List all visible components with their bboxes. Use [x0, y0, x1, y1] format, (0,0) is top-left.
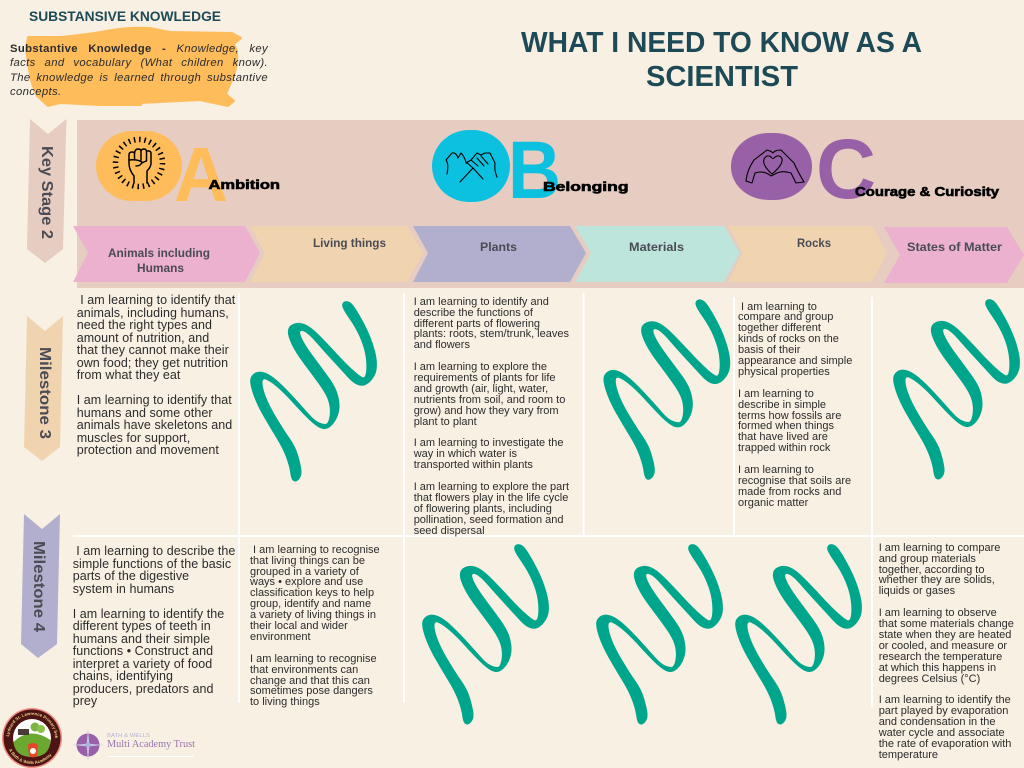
text: plants milestone 3: seed dispersal	[414, 525, 485, 537]
arrow: living things: Living things	[313, 236, 386, 250]
text: plants milestone 3: I am learning to investigate the	[414, 437, 564, 449]
text: rocks milestone 3: compare and group	[738, 311, 833, 323]
label: ambition: Ambition	[208, 177, 280, 192]
arrow: rocks	[728, 226, 887, 282]
text: plants milestone 3: that flowers play in the life cycle	[414, 492, 568, 504]
text: rocks milestone 3: trapped within rock	[738, 442, 830, 454]
squiggle: materials milestone 3	[604, 300, 730, 479]
text: animals milestone 3: amount of nutrition, and	[77, 330, 209, 344]
school logo: Lydeard St. Lawrence Primary School	[6, 712, 58, 738]
arrow: states of matter	[884, 227, 1024, 283]
text: states of matter milestone 4: the rate of evaporation with	[879, 738, 1011, 750]
text: rocks milestone 3: made from rocks and	[738, 486, 841, 498]
text: living things milestone 4: that environments can	[250, 664, 358, 676]
text: rocks milestone 3: recognise that soils are	[738, 475, 851, 487]
text: states of matter milestone 4: state when they are heated	[879, 629, 1011, 641]
text: rocks milestone 3: I am learning to	[738, 388, 814, 400]
text: states of matter milestone 4: together, according to	[879, 564, 984, 576]
text: states of matter milestone 4: research the temperature	[879, 651, 1002, 663]
arrow: animals including humans: Humans	[137, 261, 184, 275]
text: rocks milestone 3: kinds of rocks on the	[738, 333, 839, 345]
text: living things milestone 4: that living things can be	[250, 555, 365, 567]
table grid lines	[73, 293, 1024, 707]
text: animals milestone 4	[72, 544, 235, 708]
text: animals milestone 4: functions • Construct and	[73, 644, 213, 658]
text: plants milestone 3: plants: roots, stem/trunk, leaves	[414, 328, 569, 340]
text: plants milestone 3: requirements of plants for life	[414, 372, 556, 384]
multi academy trust logo	[72, 728, 195, 762]
text: rocks milestone 3: that have lived are	[738, 431, 828, 443]
text: plants milestone 3: transported within plants	[414, 459, 533, 471]
arrow: animals including humans: Animals including	[108, 246, 210, 260]
text: animals milestone 4: I am learning to describe the	[76, 544, 235, 558]
heading: substansive knowledge: SUBSTANSIVE KNOWLEDGE	[29, 9, 221, 24]
title: WHAT I NEED TO KNOW AS A	[521, 27, 922, 59]
text: living things milestone 4: ways • explore and use	[250, 576, 363, 588]
text: rocks milestone 3: basis of their	[738, 344, 800, 356]
text: animals milestone 3: that they cannot make their	[77, 343, 229, 357]
text: animals milestone 4: simple functions of the basic	[73, 556, 231, 570]
arrow: states of matter: States of Matter	[907, 240, 1002, 254]
text: animals milestone 3: animals, including humans,	[77, 306, 229, 320]
text: plants milestone 3: describe the functions of	[414, 307, 533, 319]
text: animals milestone 3: from what they eat	[77, 368, 180, 382]
text: living things milestone 4: grouped in a variety of	[250, 566, 359, 578]
text: animals milestone 3: own food; they get nutrition	[77, 356, 228, 370]
text: animals milestone 4: interpret a variety of food	[73, 656, 212, 670]
text: plants milestone 3: I am learning to identify and	[414, 296, 549, 308]
values band background	[77, 120, 1024, 288]
chevron: milestone 3	[24, 316, 63, 461]
title: SCIENTIST	[646, 61, 799, 93]
text: living things milestone 4: classification keys to help	[250, 587, 374, 599]
text: living things milestone 4: their local and wider	[250, 620, 348, 632]
text: plants milestone 3: way in which water is	[414, 448, 517, 460]
text: rocks milestone 3	[738, 300, 852, 509]
text: rocks milestone 3: I am learning to	[741, 300, 817, 312]
text: states of matter milestone 4: and condensation in the	[879, 716, 996, 728]
text: rocks milestone 3: describe in simple	[738, 399, 826, 411]
text: substantive knowledge definition: The knowledge is learned through substantive	[10, 72, 268, 84]
text: plants milestone 3: pollination, seed formation and	[414, 514, 564, 526]
text: states of matter milestone 4: or cooled, and measure or	[879, 640, 1007, 652]
chevron: milestone 3: Milestone 3	[36, 347, 53, 439]
squiggle: states of matter milestone 3	[894, 300, 1019, 479]
icon: heart hands badge	[731, 133, 812, 200]
text: plants milestone 3: grow) and how they vary from	[414, 405, 559, 417]
text: states of matter milestone 4	[878, 542, 1014, 761]
text: plants milestone 3: nutrients from soil, and room to	[414, 394, 565, 406]
text: states of matter milestone 4: at which this happens in	[879, 662, 996, 674]
text: living things milestone 4: a variety of living things in	[250, 609, 376, 621]
text: states of matter milestone 4: liquids or gases	[879, 585, 955, 597]
text: plants milestone 3: I am learning to explore the	[414, 361, 547, 373]
text: states of matter milestone 4: I am learning to identify the	[879, 694, 1011, 706]
text: states of matter milestone 4: and group materials	[879, 553, 976, 565]
text: animals milestone 3: need the right types and	[77, 318, 212, 332]
text: animals milestone 3: muscles for support,	[77, 430, 190, 444]
squiggle: materials milestone 4	[597, 545, 722, 724]
text: animals milestone 3: humans and some other	[77, 406, 213, 420]
multi academy trust logo: BATH & WELLS	[107, 733, 150, 739]
text: animals milestone 4: parts of the digestive	[73, 569, 189, 583]
chevron: key stage 2	[27, 119, 66, 263]
label: courage and curiosity: Courage & Curiosity	[855, 184, 1000, 199]
text: substantive knowledge definition: concepts.	[10, 86, 62, 98]
letter C: C	[816, 122, 876, 216]
arrow: living things	[250, 226, 423, 282]
text: states of matter milestone 4: temperature	[879, 749, 938, 761]
chevron: milestone 4: Milestone 4	[30, 541, 47, 632]
value: ambition	[96, 131, 280, 218]
text: plants milestone 3: of flowering plants, including	[414, 503, 552, 515]
text: rocks milestone 3: organic matter	[738, 497, 808, 509]
text: substantive knowledge definition	[10, 42, 268, 98]
text: animals milestone 3: I am learning to identify that	[80, 293, 235, 307]
text: plants milestone 3: and flowers	[414, 339, 470, 351]
text: rocks milestone 3: together different	[738, 322, 821, 334]
icon: raised fist badge	[96, 131, 182, 201]
text: animals milestone 4: prey	[73, 694, 97, 708]
multi academy trust logo: Multi Academy Trust	[107, 739, 195, 750]
text: animals milestone 4: different types of teeth in	[73, 619, 211, 633]
chevron: key stage 2: Key Stage 2	[38, 146, 55, 239]
arrow: rocks: Rocks	[797, 236, 831, 250]
text: animals milestone 4: humans and their simple	[73, 632, 210, 646]
text: animals milestone 3	[76, 293, 236, 457]
text: living things milestone 4: I am learning to recognise	[250, 653, 377, 665]
text: rocks milestone 3: appearance and simple	[738, 355, 852, 367]
text: living things milestone 4: I am learning to recognise	[253, 544, 380, 556]
text: states of matter milestone 4: I am learning to compare	[879, 542, 1000, 554]
text: living things milestone 4: sometimes pose dangers	[250, 685, 373, 697]
arrow: materials	[575, 226, 740, 282]
text: states of matter milestone 4: part played by evaporation	[879, 705, 1008, 717]
letter B: B	[508, 125, 561, 216]
title	[521, 27, 922, 93]
label: belonging: Belonging	[543, 179, 629, 194]
text: plants milestone 3: and growth (air, light, water,	[414, 383, 548, 395]
school logo	[2, 708, 62, 768]
text: animals milestone 4: I am learning to identify the	[73, 606, 224, 620]
arrow: animals including humans	[73, 226, 260, 282]
text: animals milestone 3: animals have skeletons and	[77, 418, 232, 432]
value: belonging	[432, 125, 629, 216]
text: plants milestone 3: plant to plant	[414, 416, 477, 428]
squiggle: rocks milestone 4	[736, 545, 861, 724]
text: animals milestone 3: protection and movement	[77, 443, 219, 457]
text: living things milestone 4: group, identify and name	[250, 598, 371, 610]
text: substantive knowledge definition: Substantive Knowledge - Knowledge, key	[10, 42, 268, 54]
text: states of matter milestone 4: I am learning to observe	[879, 607, 997, 619]
text: animals milestone 4: producers, predators and	[73, 682, 214, 696]
orange brush highlight	[26, 28, 241, 106]
text: rocks milestone 3: formed when things	[738, 420, 834, 432]
arrow: plants	[413, 226, 586, 282]
text: living things milestone 4	[250, 544, 380, 708]
text: rocks milestone 3: I am learning to	[738, 464, 814, 476]
text: rocks milestone 3: terms how fossils are	[738, 410, 841, 422]
text: states of matter milestone 4: that some materials change	[879, 618, 1014, 630]
icon: pinky promise badge	[432, 130, 510, 202]
text: states of matter milestone 4: whether they are solids,	[879, 574, 995, 586]
arrow: materials: Materials	[629, 240, 684, 254]
text: states of matter milestone 4: water cycle and associate	[879, 727, 1005, 739]
text: animals milestone 3: I am learning to identify that	[77, 393, 232, 407]
arrow: plants: Plants	[480, 240, 517, 254]
text: plants milestone 3	[414, 296, 569, 537]
squiggle: living things milestone 3	[251, 302, 376, 481]
text: living things milestone 4: environment	[250, 631, 311, 643]
text: living things milestone 4: change and that this can	[250, 675, 370, 687]
text: plants milestone 3: different parts of flowering	[414, 318, 540, 330]
chevron: milestone 4	[21, 514, 60, 658]
text: animals milestone 4: chains, identifying	[73, 669, 173, 683]
school logo: A Bath & Wells Academy	[8, 749, 52, 764]
squiggle: plants milestone 4	[423, 545, 548, 724]
text: rocks milestone 3: physical properties	[738, 366, 830, 378]
text: states of matter milestone 4: degrees Celsius (°C)	[879, 673, 980, 685]
value: courage and curiosity	[731, 122, 1000, 216]
letter A: A	[174, 132, 228, 218]
text: living things milestone 4: to living things	[250, 696, 320, 708]
text: animals milestone 4: system in humans	[73, 582, 174, 596]
text: plants milestone 3: I am learning to explore the part	[414, 481, 569, 493]
text: substantive knowledge definition: facts and vocabulary (What children know).	[10, 57, 268, 69]
